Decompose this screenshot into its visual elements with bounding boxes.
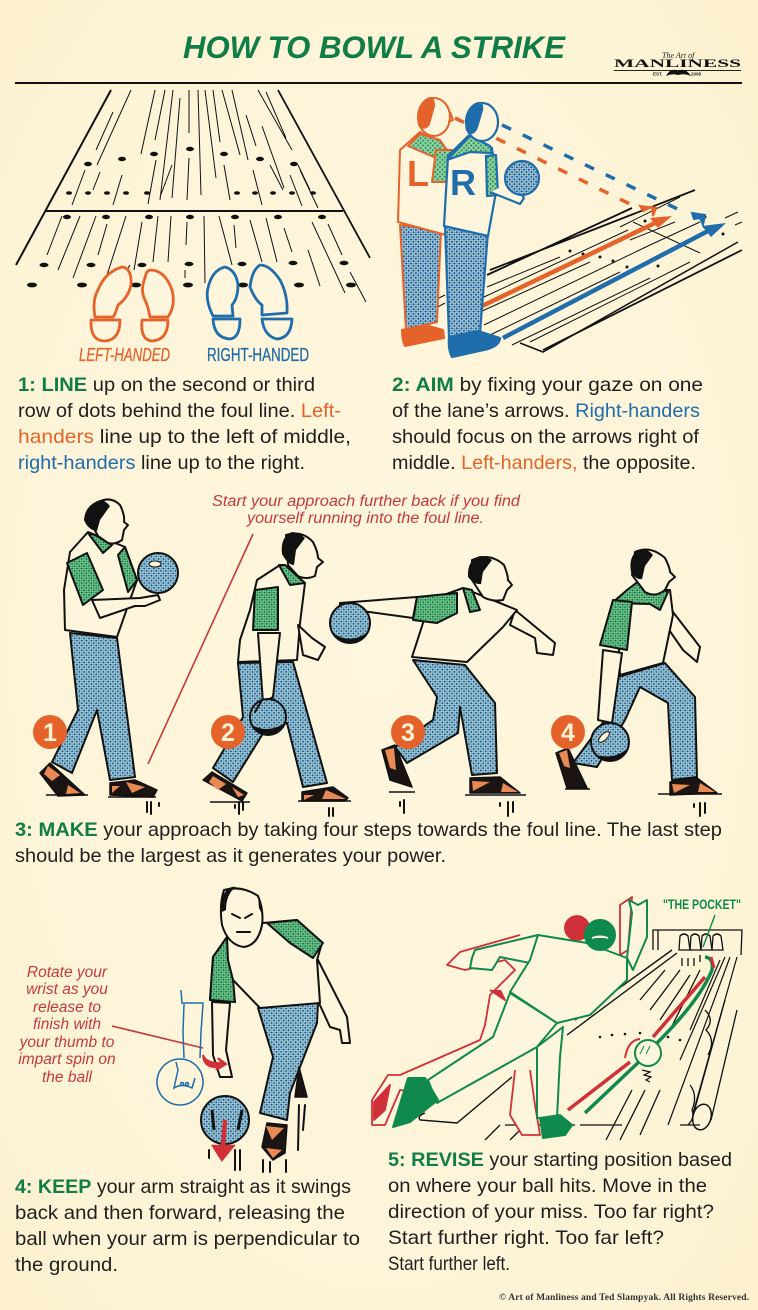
letter: L: L	[407, 153, 429, 194]
icon: wrist rotation sketch	[157, 990, 204, 1105]
text: step 4: ball when your arm is perpendicular to	[15, 1228, 360, 1250]
figure: revise position, with lane	[372, 896, 742, 1140]
callout: start further back: yourself running into the foul line.	[246, 510, 484, 527]
arrow: blue lane line	[503, 223, 726, 338]
text: step 4: the ground.	[15, 1254, 118, 1276]
figure: release	[201, 887, 350, 1172]
logo: The Art of Manliness: The Art of	[662, 51, 696, 60]
letter: R: R	[450, 162, 476, 203]
figure: approach step 3	[330, 556, 555, 816]
figure: right-handed bowler	[444, 103, 539, 357]
badge: 3	[391, 715, 425, 749]
text: step 4: 4: KEEP your arm straight as it swings	[15, 1176, 351, 1198]
callout: rotate your wrist: wrist as you	[26, 981, 108, 998]
logo: The Art of Manliness: 2008	[691, 72, 702, 76]
text: step 2: of the lane’s arrows. Right-handers	[392, 400, 700, 422]
badge: 3: 3	[401, 719, 415, 747]
logo: The Art of Manliness: EST.	[653, 72, 663, 76]
figure: red ghost bowler	[372, 897, 632, 1135]
badge: 4	[551, 715, 585, 749]
text: step 2: middle. Left-handers, the opposite.	[392, 452, 696, 474]
text: step 3: should be the largest as it generates your power.	[15, 845, 446, 867]
title: HOW TO BOWL A STRIKE	[183, 29, 566, 65]
figure: left-handed bowler	[398, 98, 453, 346]
text: step 5: Start further right. Too far left?	[388, 1227, 664, 1249]
arrow: orange lane line	[480, 216, 672, 307]
callout: start further back: Start your approach further back if you find	[212, 493, 521, 510]
badge: 4: 4	[561, 719, 575, 747]
text: step 4: back and then forward, releasing the	[15, 1202, 345, 1224]
lane boundary lines	[16, 90, 370, 302]
icon: left-handed footprints	[91, 267, 173, 341]
callout: rotate your wrist: Rotate your	[27, 964, 108, 981]
text: step 5: Start further left.	[388, 1253, 510, 1275]
text: step 1: handers line up to the left of middle,	[18, 426, 351, 448]
text: step 3: 3: MAKE your approach by taking four steps towards the foul line. The last step	[15, 819, 722, 841]
callout: rotate your wrist: impart spin on	[18, 1051, 116, 1068]
text: step 4	[15, 1176, 360, 1276]
figure: green bowler	[393, 900, 647, 1138]
badge: 2	[211, 715, 245, 749]
text: step 2	[392, 374, 703, 474]
callout: rotate your wrist	[18, 964, 203, 1086]
ball path: red miss	[568, 977, 705, 1110]
callout: start further back	[148, 493, 521, 764]
text: step 1: 1: LINE up on the second or third	[18, 374, 315, 396]
label: right-handed: RIGHT-HANDED	[207, 345, 309, 365]
arrow: blue gaze head	[692, 213, 705, 225]
sight lines	[455, 118, 636, 207]
lane dots	[27, 147, 356, 287]
panel: lane with foot positions	[16, 90, 370, 365]
text: step 5: on where your ball hits. Move in the	[388, 1175, 707, 1197]
figure: approach step 2	[203, 532, 351, 816]
figure: approach step 1	[33, 499, 178, 814]
panel: aiming at lane arrows	[398, 98, 742, 357]
callout: rotate your wrist: the ball	[42, 1069, 93, 1086]
logo: The Art of Manliness: MANLINESS	[614, 56, 742, 70]
icon: right-handed footprints	[207, 265, 292, 339]
text: step 3	[15, 819, 722, 867]
arrow: orange gaze head	[640, 206, 656, 216]
text: step 2: should focus on the arrows right of	[392, 426, 700, 448]
callout: rotate your wrist: your thumb to	[19, 1034, 115, 1051]
lane perspective lines	[432, 190, 742, 352]
badge: 2: 2	[221, 719, 235, 747]
ball path: green corrected	[585, 957, 712, 1113]
text: step 5: 5: REVISE your starting position based	[388, 1149, 732, 1171]
arrow: ball release direction	[215, 1120, 231, 1158]
badge: 1: 1	[43, 719, 57, 747]
arrow: rotation	[203, 1055, 226, 1070]
callout: rotate your wrist: finish with	[33, 1016, 101, 1033]
text: step 1: row of dots behind the foul line. Left-	[18, 400, 341, 422]
text: step 1	[18, 374, 351, 474]
figure: approach step 4	[551, 549, 722, 816]
callout: rotate your wrist: release to	[33, 999, 101, 1016]
lane and pins	[419, 930, 742, 1140]
text: step 5: direction of your miss. Too far right?	[388, 1201, 714, 1223]
logo: The Art of Manliness	[614, 51, 742, 76]
label: the pocket	[663, 896, 741, 947]
text: step 2: 2: AIM by fixing your gaze on one	[392, 374, 703, 396]
label: left-handed: LEFT-HANDED	[79, 345, 170, 365]
text: step 5	[388, 1149, 732, 1275]
text: step 1: right-handers line up to the right.	[18, 452, 305, 474]
copyright: © Art of Manliness and Ted Slampyak. All Rights Reserved.	[499, 1292, 749, 1303]
badge: 1	[33, 715, 67, 749]
